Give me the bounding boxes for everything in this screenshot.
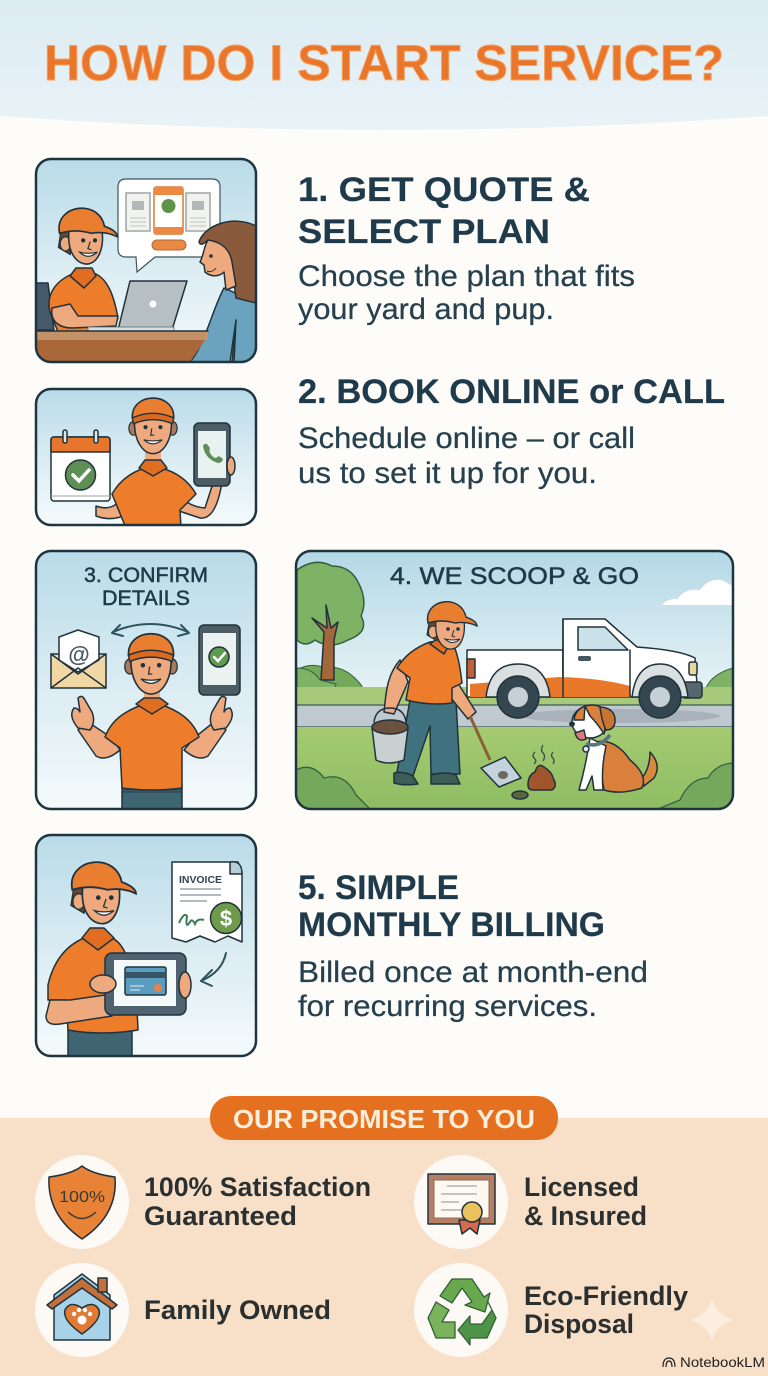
- step 2 description: us to set it up for you.: [298, 457, 597, 490]
- panel: step 2 illustration: [36, 389, 256, 528]
- promise: licensed: Licensed: [524, 1172, 639, 1202]
- bucket: [372, 708, 408, 763]
- panel: step 4 illustration: [296, 551, 733, 809]
- step 4 heading: 4. WE SCOOP & GO: [390, 563, 639, 590]
- step 3 heading: 3. CONFIRM: [84, 564, 208, 587]
- step 5 description: Billed once at month-end: [298, 956, 648, 989]
- step 1 description: Choose the plan that fits: [298, 260, 635, 293]
- bushes: [296, 763, 733, 809]
- step 5 heading: [298, 869, 605, 944]
- step 5 description: [298, 956, 648, 1023]
- worker with tablet: [46, 862, 138, 1058]
- panel: step 5 illustration: [36, 835, 256, 1058]
- promise banner: [210, 1096, 558, 1140]
- calendar: [51, 430, 110, 501]
- invoice: INVOICE: [179, 874, 222, 886]
- promise: eco-friendly: [414, 1263, 688, 1357]
- invoice: [172, 862, 242, 942]
- header band: [0, 0, 768, 130]
- envelope: [51, 630, 106, 688]
- chair: [36, 283, 54, 330]
- credit card: [125, 967, 166, 995]
- promise: family owned: [35, 1263, 331, 1357]
- arrow: invoice to tablet: [201, 953, 226, 986]
- desk: [36, 331, 208, 362]
- step 5 heading: MONTHLY BILLING: [298, 906, 605, 944]
- phone: [194, 423, 235, 486]
- promise: satisfaction: 100%: [59, 1189, 105, 1206]
- dog: [569, 705, 657, 792]
- promise: licensed: [414, 1155, 647, 1249]
- woman: [190, 221, 256, 362]
- step 5 heading: 5. SIMPLE: [298, 869, 459, 907]
- promise: eco-friendly: Disposal: [524, 1309, 634, 1339]
- step 3 heading: [84, 567, 206, 606]
- NotebookLM mark: NotebookLM: [680, 1354, 765, 1370]
- pickup truck: [467, 619, 702, 718]
- speech bubble with plan cards: [118, 179, 220, 272]
- scoop: [470, 716, 521, 787]
- ground and road: [296, 687, 733, 809]
- poop with stink lines: [512, 745, 555, 799]
- cloud: [662, 580, 733, 605]
- step 5 description: for recurring services.: [298, 990, 597, 1023]
- worker scooping: [384, 602, 477, 785]
- promise: satisfaction: 100% Satisfaction: [144, 1172, 371, 1202]
- promise: satisfaction: [35, 1155, 371, 1249]
- step 1 heading: [298, 171, 590, 251]
- promise: licensed: & Insured: [524, 1201, 647, 1231]
- promise: satisfaction: Guaranteed: [144, 1201, 297, 1231]
- promise: eco-friendly: Eco-Friendly: [524, 1281, 688, 1311]
- step 1 heading: SELECT PLAN: [298, 213, 550, 251]
- panel: step 3 illustration: [36, 551, 256, 812]
- panel: our promise footer: [0, 1096, 768, 1376]
- worker at laptop: [49, 208, 118, 332]
- step 2 description: [298, 422, 635, 490]
- step 1 description: [298, 260, 635, 326]
- step 1 heading: 1. GET QUOTE &: [298, 171, 590, 209]
- invoice: $: [220, 906, 232, 931]
- laptop: [88, 281, 187, 331]
- tablet: [90, 953, 191, 1015]
- step 3 heading: DETAILS: [102, 587, 190, 610]
- worker pointing: [72, 634, 232, 812]
- step 2 heading: 2. BOOK ONLINE or CALL: [298, 373, 725, 411]
- title: HOW DO I START SERVICE?: [44, 35, 724, 91]
- promise: family owned: Family Owned: [144, 1295, 331, 1325]
- tree: [297, 562, 733, 690]
- step 2 description: Schedule online – or call: [298, 422, 635, 455]
- dollar badge: [210, 902, 242, 934]
- step 1 description: your yard and pup.: [298, 293, 554, 326]
- envelope: @: [68, 642, 90, 667]
- promise banner: OUR PROMISE TO YOU: [233, 1104, 535, 1134]
- sparkle watermark: [690, 1298, 734, 1342]
- phone: [199, 625, 240, 695]
- panel: step 1 illustration: [36, 159, 256, 362]
- arrow: two-way: [112, 624, 189, 636]
- worker with calendar and phone: [96, 398, 222, 528]
